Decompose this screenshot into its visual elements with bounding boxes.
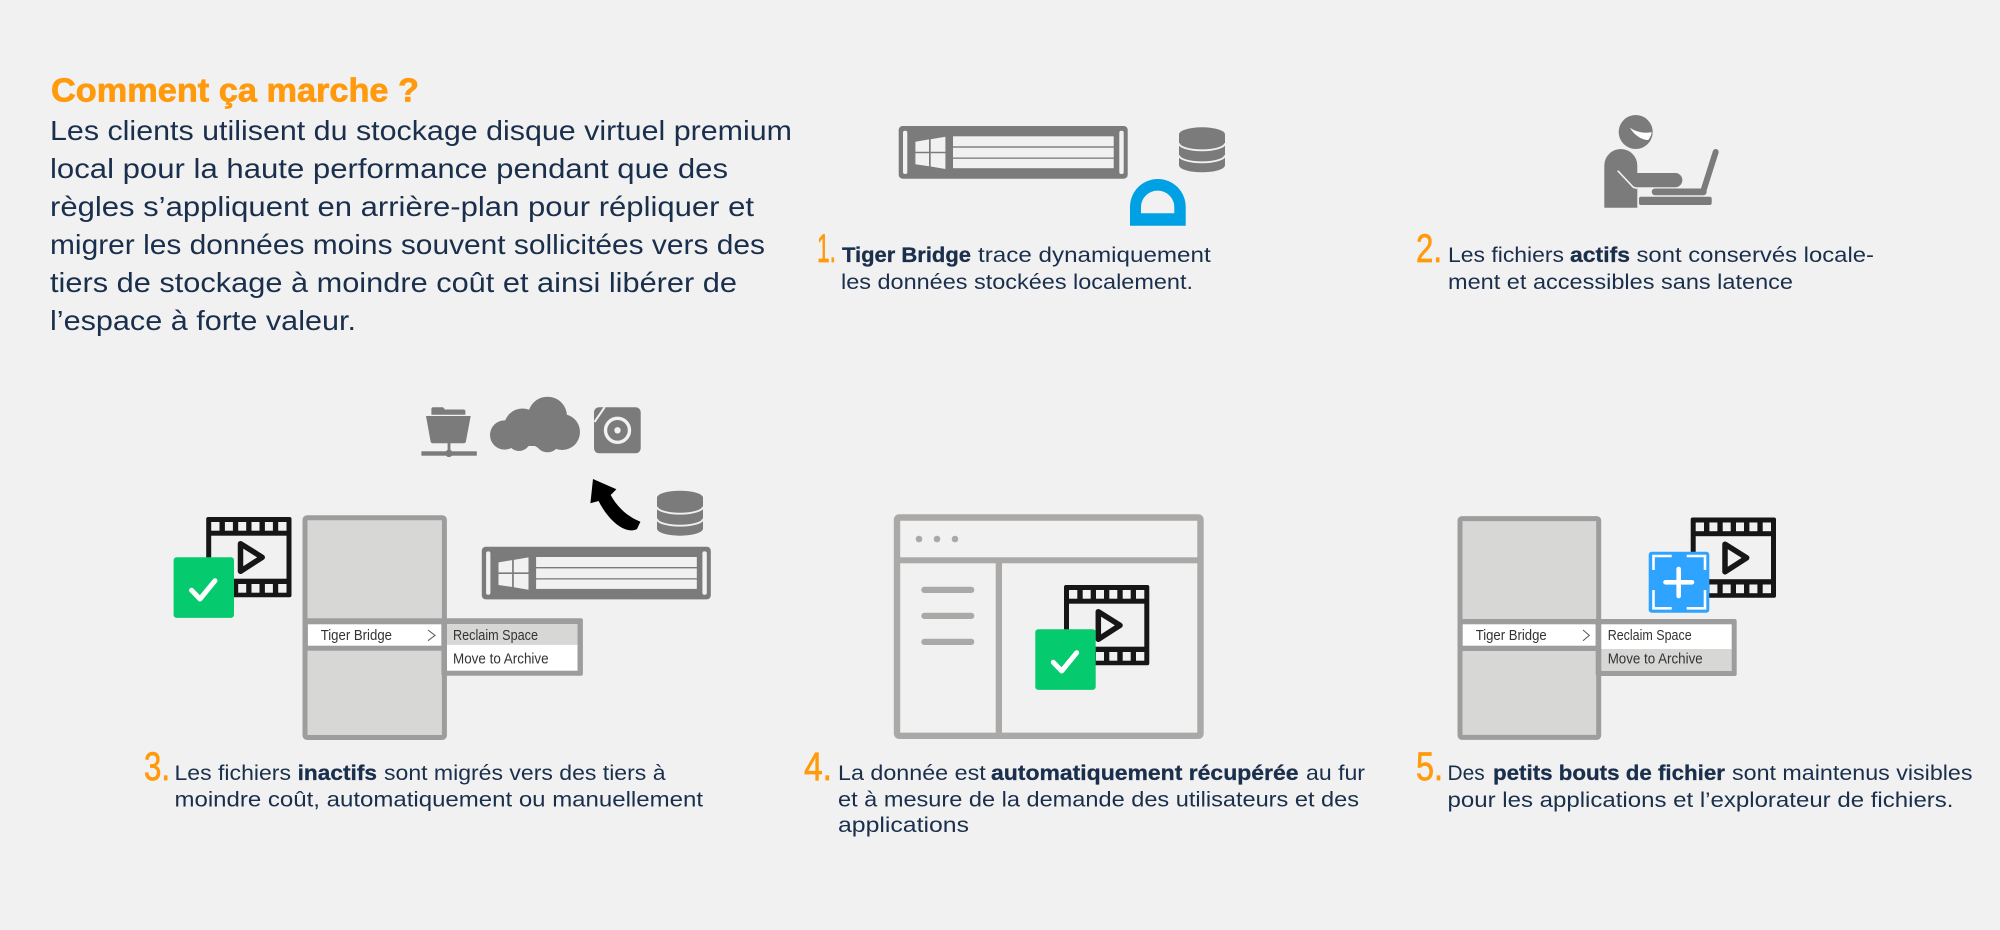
- step 5 text: [1448, 761, 1972, 812]
- intro text block: [50, 115, 792, 336]
- application window: [897, 518, 1200, 736]
- step number 4: 4.: [804, 745, 832, 789]
- arrow: [590, 479, 640, 530]
- icon: person at laptop: [1604, 115, 1716, 208]
- step 4 text: au fur: [1306, 761, 1365, 785]
- icon: video file: [1064, 585, 1149, 665]
- step 3 text: inactifs: [298, 761, 377, 785]
- icon: database: [657, 491, 703, 536]
- intro text block: l’espace à forte valeur.: [50, 305, 356, 336]
- title: Comment ça marche ?: [51, 72, 419, 109]
- step 5 text: pour les applications et l’explorateur de fichiers.: [1448, 788, 1954, 812]
- step 3 text: [174, 761, 703, 812]
- step 1 text: les données stockées localement.: [841, 270, 1193, 294]
- step 1 text: [841, 243, 1211, 294]
- icon: database: [1179, 127, 1225, 172]
- icon: network folder: [421, 407, 477, 457]
- step 3 text: Les fichiers: [174, 761, 291, 785]
- intro text block: local pour la haute performance pendant que des: [50, 153, 728, 184]
- step number 2: 2.: [1416, 227, 1442, 271]
- step number 5: 5.: [1416, 745, 1443, 789]
- file explorer with context menu: [305, 518, 583, 738]
- icon: video file: [1691, 518, 1776, 598]
- step 4 text: [838, 761, 1365, 837]
- step 5 text: sont maintenus visibles: [1732, 761, 1972, 785]
- intro text block: migrer les données moins souvent sollicitées vers des: [50, 229, 765, 260]
- step 2 text: Les fichiers: [1448, 243, 1564, 267]
- icon: Tiger Bridge blue logo: [1130, 179, 1186, 226]
- panel: step 2: [1416, 115, 1874, 294]
- step 1 text: Tiger Bridge: [842, 243, 971, 267]
- step 2 text: sont conservés locale-: [1636, 243, 1874, 267]
- icon: disk: [594, 407, 641, 453]
- step 3 text: sont migrés vers des tiers à: [384, 761, 666, 785]
- file explorer with context menu: Move to Archive: [453, 651, 549, 667]
- file explorer with context menu: Reclaim Space: [1608, 628, 1692, 644]
- step 4 text: La donnée est: [838, 761, 986, 785]
- step 2 text: [1448, 243, 1874, 294]
- intro text block: règles s’appliquent en arrière-plan pour répliquer et: [50, 191, 754, 222]
- step 4 text: et à mesure de la demande des utilisateurs et des: [838, 788, 1359, 812]
- file explorer with context menu: Reclaim Space: [453, 628, 538, 644]
- step 5 text: petits bouts de fichier: [1493, 761, 1726, 785]
- step 2 text: actifs: [1570, 243, 1630, 267]
- panel: step 3: [144, 397, 711, 812]
- panel: step 5: [1416, 518, 1972, 812]
- icon: windows server: [899, 126, 1128, 179]
- intro text block: Les clients utilisent du stockage disque virtuel premium: [50, 115, 792, 146]
- intro text block: tiers de stockage à moindre coût et ainsi libérer de: [50, 267, 737, 298]
- panel: step 1: [817, 126, 1225, 294]
- file explorer with context menu: Tiger Bridge: [321, 628, 392, 644]
- step 5 text: Des: [1448, 761, 1485, 785]
- file explorer with context menu: Move to Archive: [1608, 651, 1703, 667]
- icon: green check badge: [174, 557, 234, 618]
- icon: cloud: [490, 397, 580, 452]
- panel: step 4: [804, 518, 1365, 837]
- step 2 text: ment et accessibles sans latence: [1448, 270, 1793, 294]
- step 3 text: moindre coût, automatiquement ou manuellement: [174, 788, 703, 812]
- heading and introduction: [50, 72, 792, 336]
- icon: video file: [206, 517, 292, 597]
- icon: blue expand badge: [1649, 552, 1709, 613]
- icon: windows server: [482, 547, 711, 599]
- file explorer with context menu: [1460, 519, 1737, 737]
- step number 1: 1.: [817, 227, 836, 271]
- step 4 text: automatiquement récupérée: [991, 761, 1299, 785]
- step 4 text: applications: [838, 813, 969, 837]
- step number 3: 3.: [144, 745, 170, 789]
- icon: green check badge: [1035, 629, 1096, 690]
- file explorer with context menu: Tiger Bridge: [1476, 628, 1547, 644]
- step 1 text: trace dynamiquement: [978, 243, 1211, 267]
